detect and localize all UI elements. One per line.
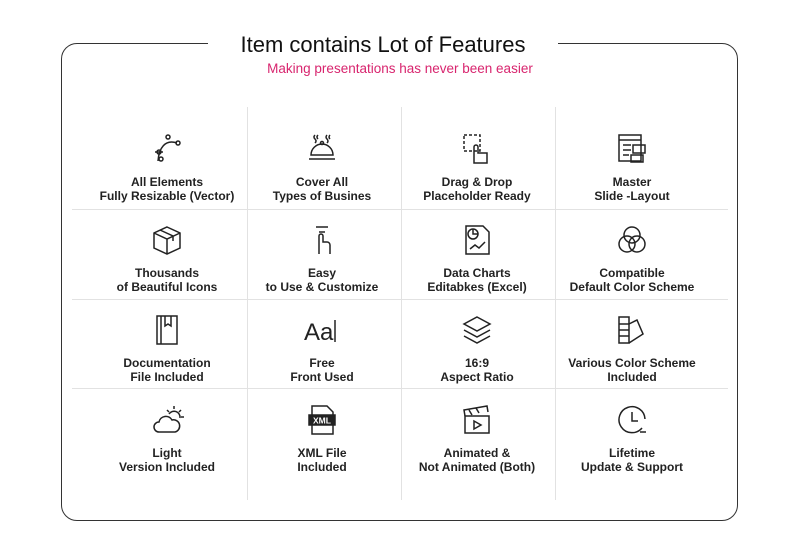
cell: font: Aa: [304, 319, 334, 346]
cell: various color: Included: [607, 370, 657, 384]
cell: animated: Animated &: [444, 446, 510, 460]
cell: xml: XML: [313, 416, 331, 426]
cell: busines: Types of Busines: [273, 189, 371, 203]
cell: busines: Cover All: [296, 175, 348, 189]
cell: color scheme: [570, 226, 694, 294]
cell: font: [290, 319, 354, 384]
cell: vector: [100, 134, 234, 203]
cell: color scheme: Default Color Scheme: [570, 280, 694, 294]
cell: vector: All Elements: [131, 175, 203, 189]
frame: [61, 43, 738, 521]
cell: various color: Various Color Scheme: [568, 356, 696, 370]
cell: data charts: Editabkes (Excel): [427, 280, 527, 294]
title: Item contains Lot of Features: [241, 32, 525, 57]
cell: icons: of Beautiful Icons: [117, 280, 217, 294]
cell: aspect: [440, 316, 514, 384]
cell: master: [594, 134, 670, 203]
cell: animated: Not Animated (Both): [419, 460, 535, 474]
cell: documentation: [123, 315, 211, 384]
cell: font: Front Used: [290, 370, 354, 384]
cell: master: Slide -Layout: [594, 189, 670, 203]
cell: various color: [568, 316, 696, 384]
cell: lifetime: Update & Support: [581, 460, 683, 474]
cell: documentation: Documentation: [123, 356, 211, 370]
cell: busines: [272, 134, 371, 203]
cell: color scheme: Compatible: [599, 266, 665, 280]
cell: drag drop: Drag & Drop: [442, 175, 512, 189]
cell: drag drop: Placeholder Ready: [423, 189, 531, 203]
cell: icons: Thousands: [135, 266, 199, 280]
cell: xml: Included: [297, 460, 347, 474]
cell: light: [119, 406, 215, 474]
cell: font: Free: [309, 356, 335, 370]
cell: icons: [117, 226, 217, 294]
cell: light: Version Included: [119, 460, 215, 474]
cell: lifetime: [581, 406, 683, 474]
cell: documentation: File Included: [130, 370, 204, 384]
title: [208, 30, 558, 60]
cell: vector: Fully Resizable (Vector): [100, 189, 234, 203]
cell: light: Light: [152, 446, 182, 460]
cell: drag drop: [423, 134, 531, 203]
cell: easy: Easy: [308, 266, 336, 280]
cell: animated: [419, 405, 535, 474]
cell: aspect: Aspect Ratio: [440, 370, 514, 384]
cell: data charts: Data Charts: [443, 266, 511, 280]
cell: xml: XML File: [297, 446, 347, 460]
cell: data charts: [427, 225, 527, 294]
cell: lifetime: Lifetime: [609, 446, 655, 460]
cell: easy: [266, 226, 378, 294]
cell: aspect: 16:9: [465, 356, 489, 370]
cell: xml: [297, 405, 347, 474]
cell: master: Master: [613, 175, 651, 189]
subtitle: Making presentations has never been easier: [267, 61, 533, 76]
cell: easy: to Use & Customize: [266, 280, 378, 294]
